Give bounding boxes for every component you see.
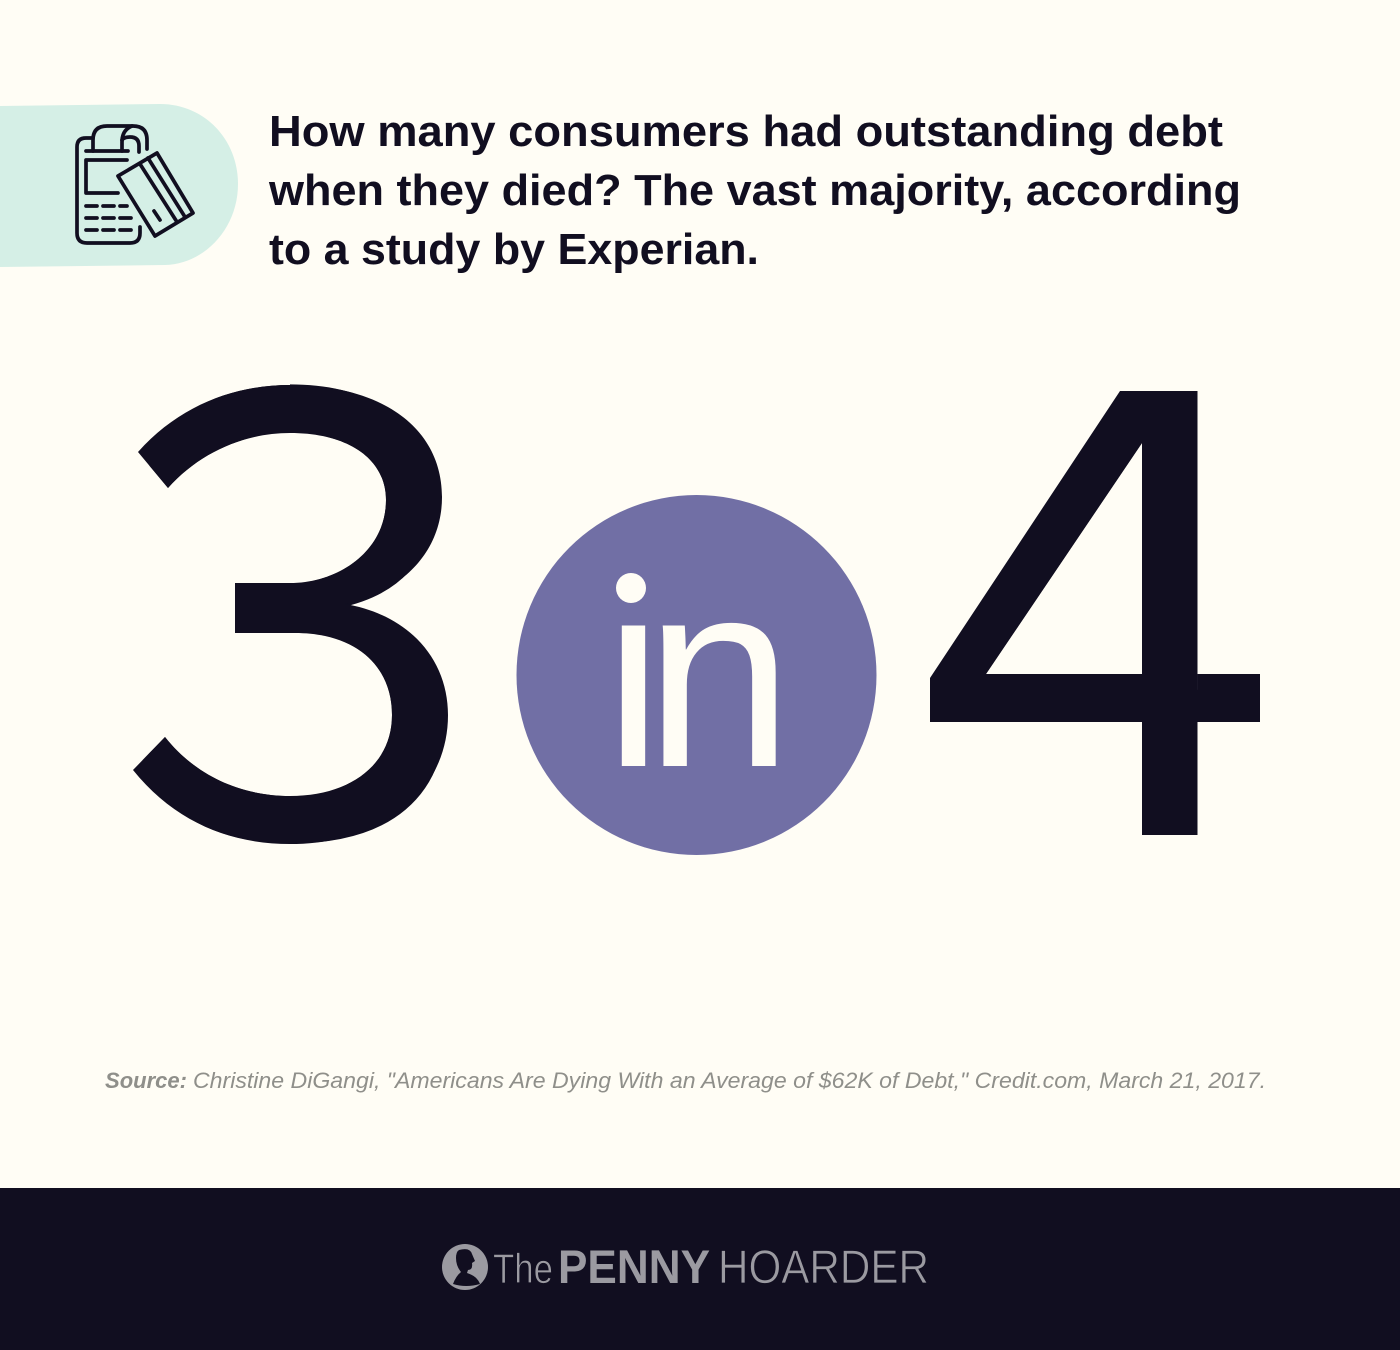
in circle: in: [604, 526, 793, 823]
footer band: [0, 1188, 1400, 1350]
heading: to a study by Experian.: [269, 225, 759, 274]
icon badge: payment terminal and credit card: [0, 104, 238, 267]
big number 4: 4: [920, 251, 1279, 972]
in circle: [516, 495, 876, 855]
footer logo: HOARDER: [718, 1240, 929, 1293]
big number 3: 3: [108, 250, 475, 975]
footer logo: [442, 1240, 929, 1293]
heading: when they died? The vast majority, according: [268, 166, 1241, 215]
heading: How many consumers had outstanding debt: [269, 107, 1223, 156]
footer logo: PENNY: [558, 1240, 710, 1293]
footer logo: The: [493, 1245, 553, 1292]
source citation: Source:: [105, 1068, 187, 1093]
heading: [268, 107, 1241, 274]
source citation: Christine DiGangi, "Americans Are Dying With an Average of $62K of Debt," Credit.com, March 21, 2017.: [193, 1068, 1266, 1093]
